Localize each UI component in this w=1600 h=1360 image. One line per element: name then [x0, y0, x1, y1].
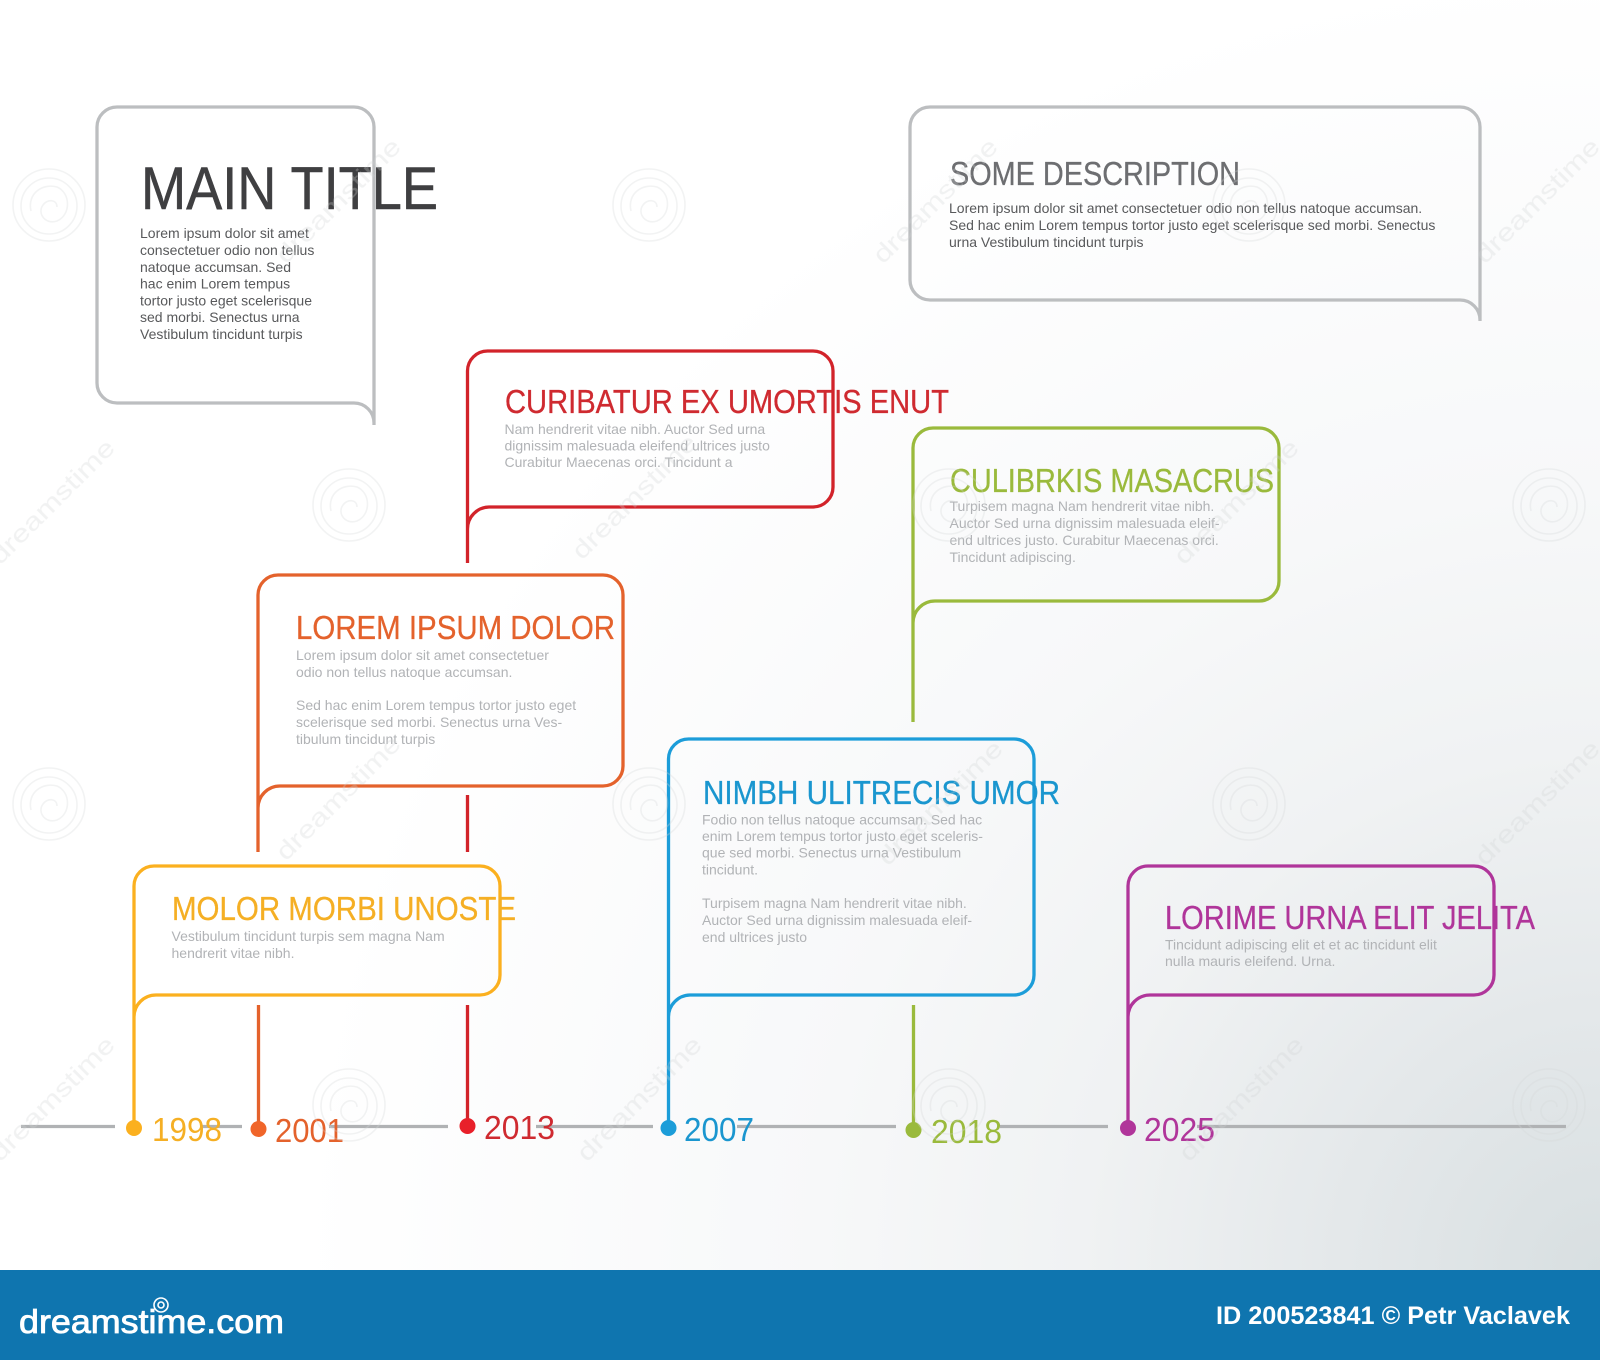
panel: main title [97, 107, 438, 425]
yellow event body text: Vestibulum tincidunt turpis sem magna Nam [172, 928, 445, 944]
blue bubble outline and stem [668, 739, 1034, 1128]
marker: 1998 [126, 1111, 222, 1148]
dot: 1998 [126, 1120, 142, 1136]
main title body text: hac enim Lorem tempus [140, 276, 290, 292]
watermark pattern: dreamstime [270, 730, 407, 866]
icon: logo spiral [154, 1298, 168, 1312]
watermark pattern [0, 133, 1600, 1167]
panel: orange event [258, 575, 623, 1126]
heading: purple event: LORIME URNA ELIT JELITA [1165, 899, 1535, 936]
watermark pattern: dreamstime [1168, 434, 1305, 570]
watermark pattern: dreamstime [1173, 1031, 1310, 1167]
blue event body text: enim Lorem tempus tortor justo eget sceleris- [702, 828, 983, 844]
year: 1998: 1998 [152, 1111, 222, 1148]
green bubble outline and stem [913, 428, 1279, 722]
purple bubble outline and stem [1128, 866, 1494, 1128]
heading: some description: SOME DESCRIPTION [950, 155, 1240, 192]
orange event body text: Lorem ipsum dolor sit amet consectetuer [296, 647, 549, 663]
marker: 2013 [460, 1109, 555, 1146]
orange stem lower section [257, 1005, 260, 1126]
panel: blue event [668, 739, 1060, 1128]
panel: purple event [1128, 866, 1535, 1128]
red bubble outline and stem [468, 351, 833, 563]
watermark pattern: dreamstime [867, 133, 1004, 269]
yellow event body text: hendrerit vitae nibh. [172, 945, 294, 961]
orange event body text: scelerisque sed morbi. Senectus urna Ves- [296, 714, 562, 730]
purple event body text: Tincidunt adipiscing elit et et ac tincidunt elit [1165, 936, 1437, 952]
main title body text: natoque accumsan. Sed [140, 259, 291, 275]
watermark pattern: dreamstime [1469, 735, 1600, 871]
description body text: Lorem ipsum dolor sit amet consectetuer odio non tellus natoque accumsan. [949, 200, 1422, 216]
watermark pattern: dreamstime [566, 429, 703, 565]
logo: dreamstime.com: dreamstime.com [19, 1303, 284, 1340]
watermark pattern: dreamstime [1469, 133, 1600, 269]
footer banner [0, 1270, 1600, 1360]
watermark pattern: dreamstime [872, 735, 1009, 871]
panel: red event [468, 351, 949, 1124]
orange event body text: tibulum tincidunt turpis [296, 731, 435, 747]
footer background [0, 1270, 1600, 1360]
marker: 2025 [1120, 1111, 1215, 1148]
description bubble outline [910, 107, 1480, 321]
blue event body text: Turpisem magna Nam hendrerit vitae nibh. [702, 895, 967, 911]
orange bubble outline and stem [258, 575, 623, 852]
main title bubble outline [97, 107, 374, 425]
year: 2018: 2018 [931, 1113, 1002, 1150]
description body text: Sed hac enim Lorem tempus tortor justo eget scelerisque sed morbi. Senectus [949, 217, 1435, 233]
marker: 2018 [906, 1113, 1002, 1150]
main title body text: tortor justo eget scelerisque [140, 292, 312, 308]
red event body text: Nam hendrerit vitae nibh. Auctor Sed urna [504, 421, 765, 437]
image id and credit: ID 200523841 © Petr Vaclavek [1216, 1302, 1570, 1330]
heading: green event: CULIBRKIS MASACRUS [950, 462, 1274, 499]
orange event body text: odio non tellus natoque accumsan. [296, 664, 512, 680]
year: 2001: 2001 [275, 1112, 344, 1149]
main title body text: consectetuer odio non tellus [140, 242, 314, 258]
red event body text: dignissim malesuada eleifend ultrices justo [504, 438, 770, 454]
panel: yellow event [134, 866, 516, 1128]
timeline axis [21, 1125, 1566, 1128]
year: 2025: 2025 [1144, 1111, 1215, 1148]
dot: 2025 [1120, 1120, 1136, 1136]
green stem lower section [912, 1005, 915, 1128]
blue event body text: tincidunt. [702, 862, 758, 878]
watermark pattern: dreamstime [270, 133, 407, 269]
dot: 2018 [906, 1122, 922, 1138]
purple event body text: nulla mauris eleifend. Urna. [1165, 953, 1335, 969]
heading: red event: CURIBATUR EX UMORTIS ENUT [505, 383, 949, 420]
green event body text: end ultrices justo. Curabitur Maecenas orci. [950, 532, 1219, 548]
blue event body text: Auctor Sed urna dignissim malesuada eleif- [702, 912, 972, 928]
panel: description [910, 107, 1480, 321]
dot: 2001 [250, 1121, 266, 1137]
red stem lower sections [466, 795, 469, 1124]
yellow bubble outline and stem [134, 866, 500, 1128]
heading: main title: MAIN TITLE [141, 155, 438, 222]
marker: 2001 [250, 1112, 344, 1149]
watermark pattern: dreamstime [571, 1031, 708, 1167]
heading: orange event: LOREM IPSUM DOLOR [296, 609, 615, 646]
heading: yellow event: MOLOR MORBI UNOSTE [172, 890, 516, 927]
red event body text: Curabitur Maecenas orci. Tincidunt a [504, 454, 733, 470]
dot: 2013 [460, 1118, 476, 1134]
main title body text: Lorem ipsum dolor sit amet [140, 225, 309, 241]
main title body text: Vestibulum tincidunt turpis [140, 326, 303, 342]
green event body text: Auctor Sed urna dignissim malesuada eleif- [950, 515, 1220, 531]
year: 2007: 2007 [684, 1111, 754, 1148]
blue event body text: Fodio non tellus natoque accumsan. Sed hac [702, 812, 982, 828]
green event body text: Turpisem magna Nam hendrerit vitae nibh. [950, 498, 1214, 514]
year: 2013: 2013 [484, 1109, 555, 1146]
description body text: urna Vestibulum tincidunt turpis [949, 234, 1144, 250]
panel: green event [913, 428, 1279, 1128]
blue event body text: que sed morbi. Senectus urna Vestibulum [702, 844, 961, 860]
heading: blue event: NIMBH ULITRECIS UMOR [703, 774, 1060, 811]
green event body text: Tincidunt adipiscing. [950, 549, 1076, 565]
marker: 2007 [660, 1111, 754, 1148]
dot: 2007 [660, 1120, 676, 1136]
main title body text: sed morbi. Senectus urna [140, 309, 300, 325]
orange event body text: Sed hac enim Lorem tempus tortor justo eget [296, 697, 576, 713]
blue event body text: end ultrices justo [702, 929, 807, 945]
